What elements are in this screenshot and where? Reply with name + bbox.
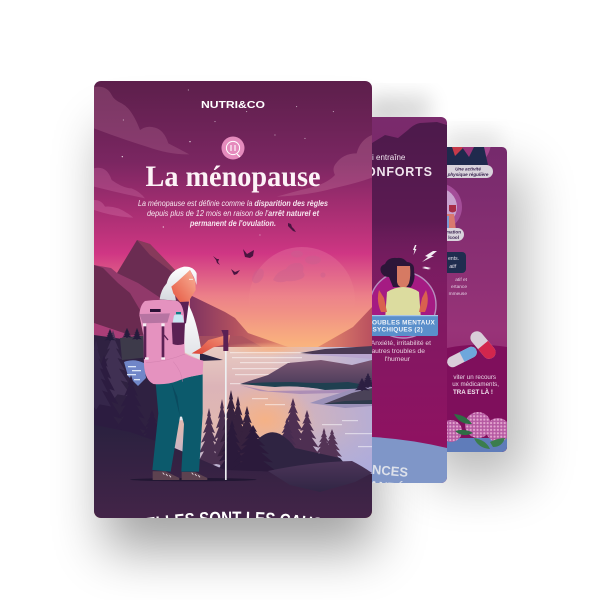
blue footer band: [372, 437, 447, 483]
backpack: [139, 300, 203, 384]
drop shadows: [105, 95, 525, 550]
heading: footer text: ENCES: [363, 461, 409, 480]
label: alcohol: mation: [446, 230, 461, 234]
text block: anxiety: autres troubles de: [371, 348, 425, 355]
wave: [447, 345, 507, 452]
text block: back card note: [448, 278, 467, 295]
badge: dark label: [447, 252, 466, 273]
text block: naturopathy message: viter un recours: [453, 374, 496, 381]
badge: dark label: atif: [449, 264, 457, 270]
heading: footer text: [372, 464, 408, 483]
illustration: clover flowers: [447, 412, 507, 449]
text block: naturopathy message: ux médicaments,: [452, 381, 499, 388]
text block: back card note: mmeuse: [449, 292, 467, 297]
dark header cloud: [372, 122, 447, 260]
shoes: [153, 471, 179, 480]
panel: middle card: [372, 117, 447, 483]
arm: [192, 335, 230, 354]
badge: dark label: ents.: [448, 256, 459, 262]
icon: pause symbol: [222, 136, 244, 160]
panel: front card: [94, 81, 372, 518]
heading: footer text: SANTÉ: [360, 477, 405, 496]
illustration: woman with mental strain: [370, 258, 436, 338]
text block: definition: [138, 199, 328, 228]
heading: next section teaser: QUELLES SONT LES CAUSES: [146, 512, 320, 518]
text block: definition: La ménopause est définie comme la disparition des règles: [138, 199, 328, 208]
label: physical activity: [447, 165, 493, 178]
islands: [200, 346, 376, 408]
text block: anxiety: Anxiété, irritabilité et: [371, 340, 431, 347]
foreground pines: [218, 390, 274, 472]
ground: [94, 448, 372, 518]
text block: anxiety: [372, 340, 431, 361]
illustration: blue base strip: [447, 438, 507, 452]
clouds and stars: [94, 87, 372, 235]
illustration: wine glass in circle: [447, 185, 462, 228]
pole: [225, 350, 227, 480]
text block: back card note: ertance: [451, 284, 467, 290]
heading: middle card: i entraîne: [372, 153, 406, 162]
label: alcohol: lcool: [448, 235, 459, 240]
icon: capsule red: [470, 331, 496, 359]
infographic: stacked cards mockup: [72, 81, 554, 583]
heading: middle card: [372, 154, 432, 176]
ridge behind hiker's pole: [255, 432, 345, 472]
text block: anxiety: l'humeur: [385, 356, 411, 363]
logo: NUTRI&CO: [201, 99, 265, 111]
label: mental troubles: [372, 315, 438, 336]
hiker illustration: [130, 267, 257, 481]
label: alcohol: [447, 228, 464, 241]
jacket: [181, 305, 201, 359]
label: mental troubles: TROUBLES MENTAUX: [363, 320, 435, 326]
icon: capsule blue: [447, 346, 477, 368]
side pocket and bottle: [173, 314, 184, 323]
legs: [177, 410, 184, 421]
label: physical activity: physique régulière: [447, 172, 489, 177]
label: mental troubles: ET PSYCHIQUES (2): [357, 326, 423, 334]
hair: [160, 267, 197, 301]
lake: [174, 343, 372, 474]
text block: naturopathy message: TRA EST LÀ !: [453, 389, 493, 396]
text block: definition: permanent de l'ovulation.: [189, 219, 276, 228]
label: physical activity: Une activité: [455, 166, 481, 172]
text block: naturopathy message: [452, 374, 498, 394]
background pines: [196, 398, 344, 469]
title: La ménopause: [146, 160, 320, 193]
left bank forest: [94, 328, 158, 441]
moon: [252, 247, 352, 283]
birds: [213, 223, 296, 275]
mountains: [94, 240, 372, 350]
illustration: person with raised arms: [447, 147, 490, 165]
ground shadow: [130, 478, 257, 481]
text block: definition: depuis plus de 12 mois en raison de l'arrêt naturel et: [147, 209, 319, 218]
heading: middle card: ONFORTS: [366, 165, 433, 179]
text block: back card note: atif et: [455, 277, 468, 283]
face: [171, 270, 196, 302]
icon: lightning strain: [413, 245, 437, 270]
panel: back card: [447, 147, 507, 452]
